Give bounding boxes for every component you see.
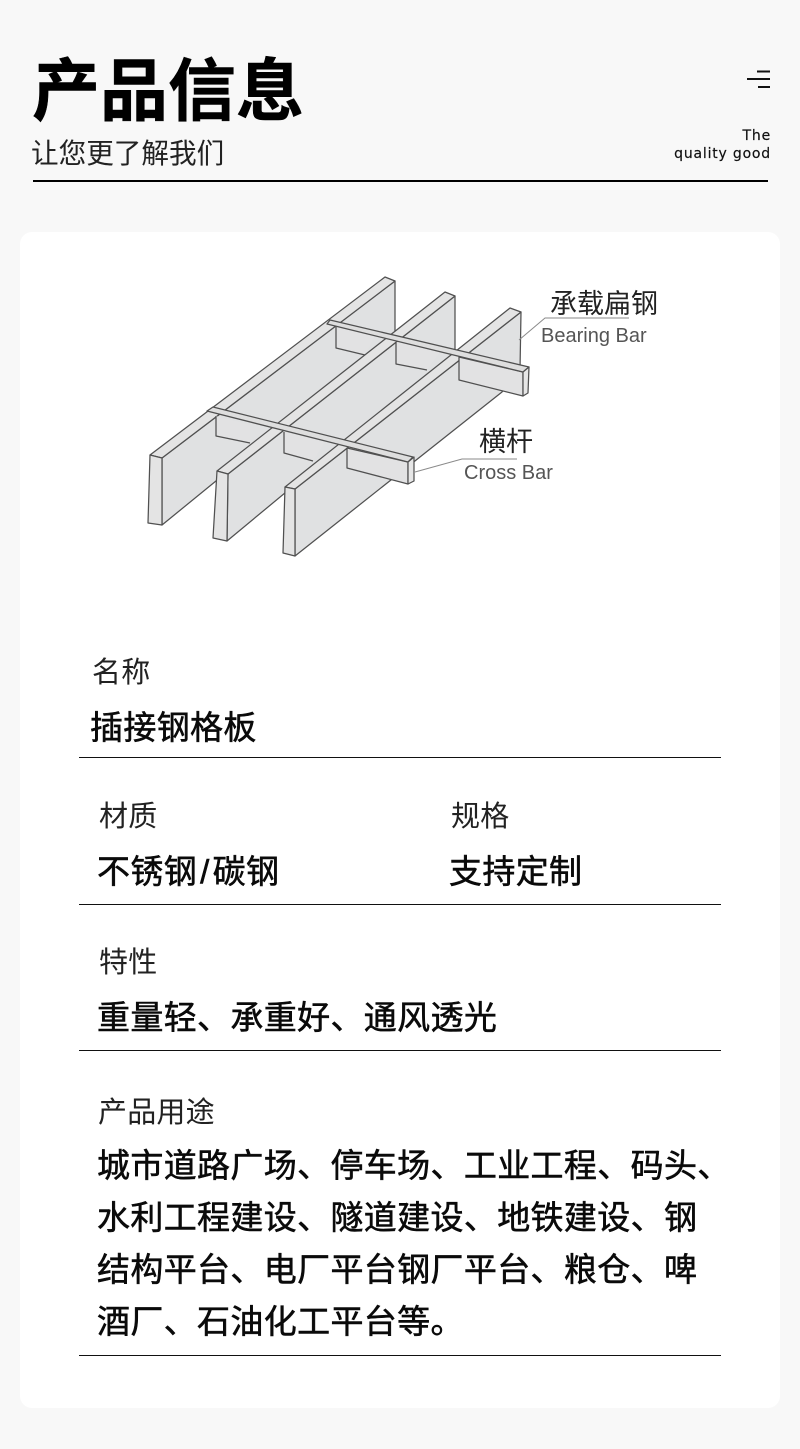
field: usage value: 城市道路广场、停车场、工业工程、码头、 [97,1147,731,1184]
field: usage value: 水利工程建设、隧道建设、地铁建设、钢 [97,1199,697,1236]
slogan: quality good [674,146,771,162]
label: cross bar en: Cross Bar [464,462,553,484]
field: spec value: 支持定制 [449,853,582,890]
icon: menu [747,70,770,88]
leader: bearing bar [519,318,629,340]
field: usage value: 结构平台、电厂平台钢厂平台、粮仓、啤 [97,1251,697,1288]
leader: cross bar [415,459,517,472]
field: usage label: 产品用途 [98,1097,215,1129]
bearing bar 2 [213,292,455,541]
bearing bar 1 [148,277,395,525]
slogan [674,128,771,162]
slogan: The [743,128,771,144]
panel: product card [20,232,780,1408]
field: material label: 材质 [99,801,157,833]
header rule [33,180,768,182]
field: feature label: 特性 [99,947,157,979]
field: spec label: 规格 [451,801,509,833]
label: bearing bar en: Bearing Bar [541,325,647,347]
field: name label: 名称 [92,657,150,689]
label: cross bar cn: 横杆 [479,427,533,457]
subtitle: 让您更了解我们 [31,138,224,169]
label: bearing bar cn: 承载扁钢 [550,289,658,319]
field: material value: 不锈钢/碳钢 [97,853,279,890]
diagram: steel grating [147,276,658,557]
field: name value: 插接钢格板 [90,709,257,746]
cross bar back [327,320,529,396]
field: feature value: 重量轻、承重好、通风透光 [97,999,497,1036]
field: usage value [97,1147,731,1340]
bearing bar 3 [283,308,521,556]
cross bar front [207,407,414,484]
field: usage value: 酒厂、石油化工平台等。 [97,1303,464,1340]
title: 产品信息 [32,54,304,130]
